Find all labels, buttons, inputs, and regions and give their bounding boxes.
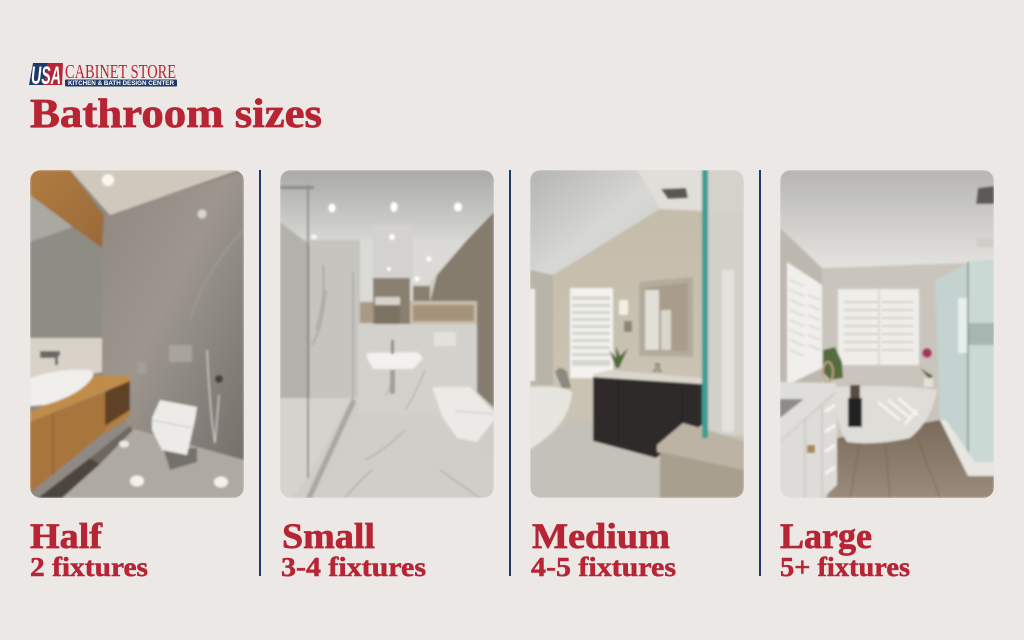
toilet <box>432 387 494 442</box>
panel: medium bathroom photo <box>530 170 744 498</box>
ceiling right <box>637 170 744 213</box>
shower curb <box>306 398 356 498</box>
orchid <box>920 348 933 387</box>
sink pipe <box>390 370 395 394</box>
upper wall <box>360 240 413 302</box>
divider <box>509 170 511 576</box>
window <box>570 288 613 378</box>
shelf right <box>410 301 477 324</box>
shower floor <box>280 397 308 410</box>
floor <box>827 420 994 498</box>
side wall <box>530 270 553 385</box>
label: small <box>281 516 426 582</box>
mirror ceiling reflection <box>413 240 467 285</box>
ceiling <box>780 170 994 268</box>
lights <box>102 174 114 186</box>
shower back wall <box>310 240 360 398</box>
mirror wall <box>73 226 94 242</box>
plant <box>609 346 628 368</box>
faucets <box>653 364 662 371</box>
logo mark: USA: USA <box>31 62 61 90</box>
label: half <box>30 516 148 582</box>
main wall <box>102 172 244 460</box>
tub <box>835 386 937 443</box>
ceiling left <box>530 170 660 275</box>
sconce <box>619 300 628 315</box>
divider <box>259 170 261 576</box>
vanity body <box>30 392 105 493</box>
panel: half bathroom photo <box>30 170 244 498</box>
sink <box>367 352 423 369</box>
shower base <box>940 420 994 476</box>
large fixtures: 5+ fixtures <box>780 552 910 582</box>
toilet <box>152 400 197 455</box>
backsplash <box>30 338 102 385</box>
floor <box>317 415 494 498</box>
left window <box>787 262 822 385</box>
faucet <box>40 351 60 365</box>
small fixtures: 3-4 fixtures <box>281 552 426 582</box>
plant <box>823 347 843 380</box>
vent <box>661 188 688 199</box>
half heading: Half <box>30 516 103 556</box>
mirror reflection top <box>30 195 73 242</box>
panel: large bathroom photo <box>780 170 994 498</box>
paper holder <box>138 363 146 374</box>
ceiling <box>70 170 238 215</box>
shower glass <box>935 260 994 475</box>
title: Bathroom sizes <box>30 90 322 136</box>
label: large <box>780 516 910 582</box>
logo: USA Cabinet Store <box>29 61 177 90</box>
bench <box>657 423 744 470</box>
small heading: Small <box>282 516 375 556</box>
flush plate <box>169 345 192 362</box>
panel: small bathroom photo <box>280 170 494 498</box>
vanity niche <box>105 378 130 428</box>
tub <box>530 387 572 449</box>
logo tagline bar: KITCHEN & BATH DESIGN CENTER <box>68 81 175 87</box>
label: medium <box>531 516 676 582</box>
floor <box>50 428 244 498</box>
divider <box>759 170 761 576</box>
shower <box>708 170 744 215</box>
ceiling box <box>384 242 410 276</box>
vanity <box>593 375 702 458</box>
floor <box>530 420 660 498</box>
logo mark: USA <box>29 62 63 90</box>
mirror niche <box>373 278 410 332</box>
logo wordmark: CABINET STORE <box>65 61 176 83</box>
vent <box>976 186 994 204</box>
counter <box>593 370 702 384</box>
large heading: Large <box>780 516 872 556</box>
vanity cabinets <box>780 392 837 498</box>
vanity top <box>780 382 837 441</box>
left wall <box>780 228 822 390</box>
glass lines <box>307 185 309 478</box>
right brown wall <box>430 212 494 408</box>
towel <box>848 398 862 427</box>
lower marble wall <box>358 322 412 397</box>
vessel sink <box>30 370 93 406</box>
medium heading: Medium <box>532 516 670 556</box>
medium fixtures: 4-5 fixtures <box>531 552 676 582</box>
shelf left <box>360 302 373 323</box>
shower side wall <box>280 222 310 410</box>
hand shower <box>207 350 219 443</box>
vanity top <box>30 375 130 422</box>
back window <box>838 289 919 365</box>
glass edge <box>702 170 708 438</box>
flush plate <box>434 332 456 346</box>
half fixtures: 2 fixtures <box>30 552 148 582</box>
ceiling lights <box>328 204 336 212</box>
ceiling <box>280 170 494 240</box>
toilet shadow <box>163 448 197 470</box>
wood beam <box>30 170 104 248</box>
mirror <box>639 277 693 357</box>
